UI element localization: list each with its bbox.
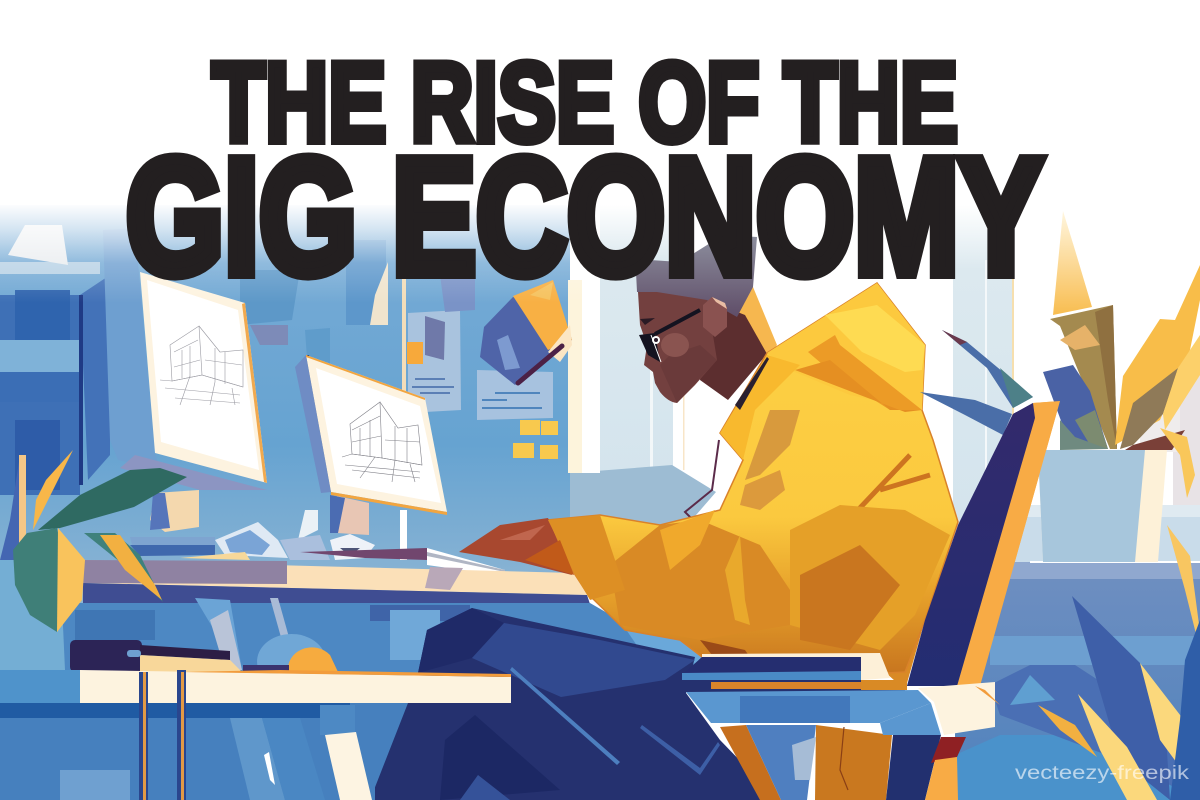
title line 1: THE RISE OF THE	[212, 40, 958, 165]
panel: window area	[600, 205, 1200, 563]
desk top	[83, 560, 590, 604]
board with notes	[407, 275, 558, 459]
white fade over room top	[0, 203, 600, 303]
person: head	[636, 235, 757, 403]
under-desk area	[0, 560, 705, 680]
person: trousers	[370, 608, 778, 800]
hair	[636, 235, 757, 317]
plant: background leaves	[920, 330, 1033, 435]
person: hoodie	[547, 283, 958, 690]
title	[126, 40, 1043, 308]
sketch: building drawing	[342, 402, 422, 482]
person: hands	[459, 515, 625, 600]
pot	[1038, 450, 1167, 562]
right wall shelf	[955, 561, 1200, 800]
chair: back front edge	[907, 401, 1060, 686]
foreground table items	[70, 634, 338, 672]
icon: desk lamp	[480, 280, 572, 385]
person: neck and collar	[700, 273, 777, 400]
foreground table	[0, 670, 511, 800]
monitor: small	[295, 355, 447, 560]
plant: foreground leaves	[1038, 525, 1200, 800]
plant: potted plant	[1038, 211, 1200, 562]
person: lower jacket hem	[720, 725, 892, 800]
ear	[703, 297, 727, 337]
person: hoodie back cable	[685, 440, 719, 522]
sketch: building drawing	[160, 326, 243, 405]
watermark: vecteezy-freepik	[1015, 762, 1189, 784]
panel: back wall and bookshelf	[0, 205, 716, 605]
monitor: large	[103, 228, 267, 532]
desk items: crumpled paper and keyboard	[130, 510, 505, 576]
chair: seat and armrest	[682, 653, 1000, 800]
plant: left desk plant	[0, 450, 187, 632]
chair: back behind hoodie base	[907, 401, 1060, 686]
glasses	[639, 310, 700, 362]
